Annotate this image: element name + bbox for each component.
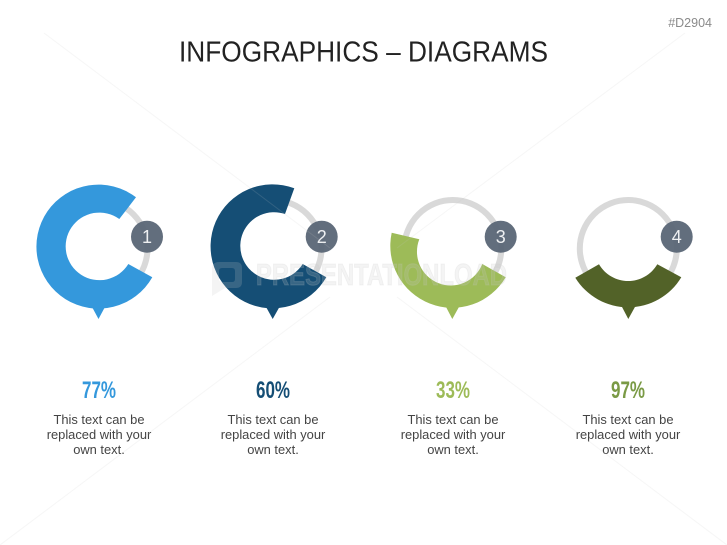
text block 1: own text.	[73, 442, 125, 457]
chart 1: 77%: 1	[142, 227, 152, 247]
text block 1: This text can be	[54, 412, 144, 427]
chart 4: 97%: 4	[672, 227, 682, 247]
text block 4: own text.	[602, 442, 654, 457]
watermark	[212, 257, 507, 296]
text block 1: replaced with your	[47, 427, 152, 442]
title: INFOGRAPHICS – DIAGRAMS	[179, 36, 548, 68]
chart 3: 33%	[390, 200, 517, 319]
percentage 60%: 60%	[256, 377, 290, 404]
text block 3: This text can be	[408, 412, 498, 427]
percentage 33%: 33%	[436, 377, 470, 404]
text block 3: replaced with your	[401, 427, 506, 442]
text block 4: This text can be	[582, 412, 674, 427]
chart 2: 60%	[211, 184, 338, 319]
percentage 97%: 97%	[611, 377, 645, 404]
text block 3: own text.	[427, 442, 479, 457]
text block 2: This text can be	[228, 412, 318, 427]
watermark: PRESENTATIONLOAD	[256, 257, 507, 292]
text block 2: replaced with your	[221, 427, 326, 442]
text block 4: replaced with your	[576, 427, 681, 442]
chart 3: 33%: 3	[496, 227, 506, 247]
chart 4: 97%	[575, 200, 693, 319]
chart 1: 77%	[36, 185, 163, 319]
document code: #D2904	[668, 16, 712, 30]
chart 2: 60%: 2	[317, 227, 327, 247]
percentage 77%: 77%	[82, 377, 116, 404]
text block 2: own text.	[247, 442, 299, 457]
